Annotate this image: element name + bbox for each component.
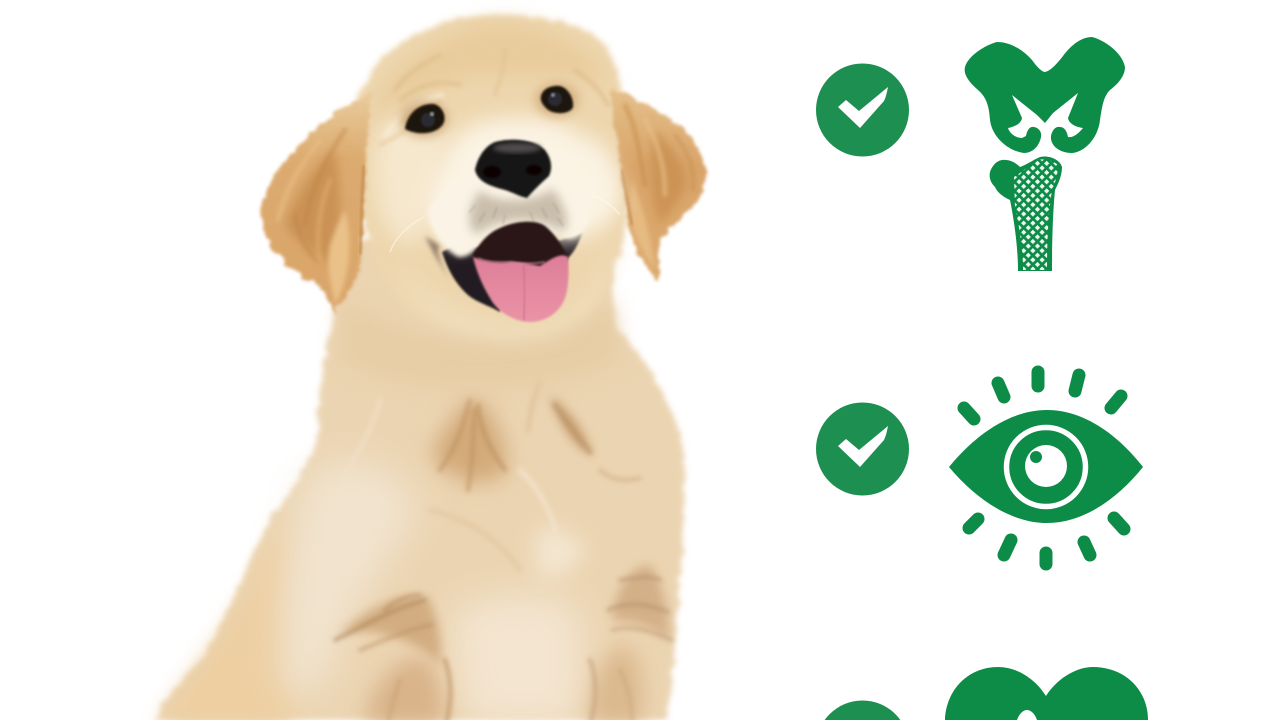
lower cheek	[420, 264, 619, 340]
hind leg shading	[154, 553, 301, 720]
chest bright patch	[535, 528, 585, 577]
infographic canvas	[152, 8, 1148, 720]
check badge: heart health, cropped	[816, 700, 909, 720]
muzzle whisker shading	[470, 188, 567, 235]
chest centre	[453, 595, 583, 720]
puppy right ear	[610, 88, 705, 282]
puppy left ear	[262, 92, 372, 312]
puppy mouth dark left	[425, 236, 505, 312]
check mark	[838, 87, 888, 128]
left ear inner shade	[285, 150, 340, 265]
check badge: hips and joints	[816, 64, 909, 156]
check mark	[838, 426, 888, 467]
chest fur strokes	[335, 380, 672, 720]
left arm fold	[338, 596, 441, 665]
puppy whiskers	[390, 195, 620, 252]
icon: eye	[949, 372, 1143, 564]
puppy tongue	[473, 255, 569, 322]
chest tuft	[432, 395, 506, 482]
right arm fold	[612, 565, 670, 640]
left ear flap highlight	[328, 210, 349, 305]
head top tint	[370, 22, 612, 120]
heart notch	[1017, 710, 1037, 720]
check badge: eyes	[816, 402, 909, 496]
puppy body	[154, 240, 685, 720]
eye rays	[964, 372, 1124, 564]
puppy photo illustration	[154, 15, 705, 720]
right cheek	[600, 144, 616, 207]
puppy muzzle	[426, 117, 618, 257]
below left arm	[365, 657, 445, 720]
left cheek	[375, 111, 446, 243]
puppy nose	[475, 140, 551, 198]
icon: heart, cropped	[945, 667, 1148, 720]
puppy right eye	[535, 83, 579, 117]
femur lattice	[1014, 159, 1058, 270]
chest light band	[282, 459, 420, 695]
shoulder shadow	[550, 395, 592, 455]
pelvis	[965, 37, 1125, 153]
puppy head	[355, 15, 630, 338]
neck shading	[340, 300, 620, 388]
icon: hip and femur bones	[965, 37, 1125, 271]
puppy left eye	[400, 101, 448, 137]
puppy mouth opening	[473, 222, 568, 275]
eye outline	[949, 410, 1143, 523]
puppy mouth dark right	[555, 233, 582, 258]
right ear flap highlight	[630, 184, 654, 265]
forehead fur strokes	[380, 50, 608, 145]
below right arm	[590, 645, 643, 720]
right ear inner shade	[651, 130, 686, 225]
femur	[990, 157, 1062, 271]
